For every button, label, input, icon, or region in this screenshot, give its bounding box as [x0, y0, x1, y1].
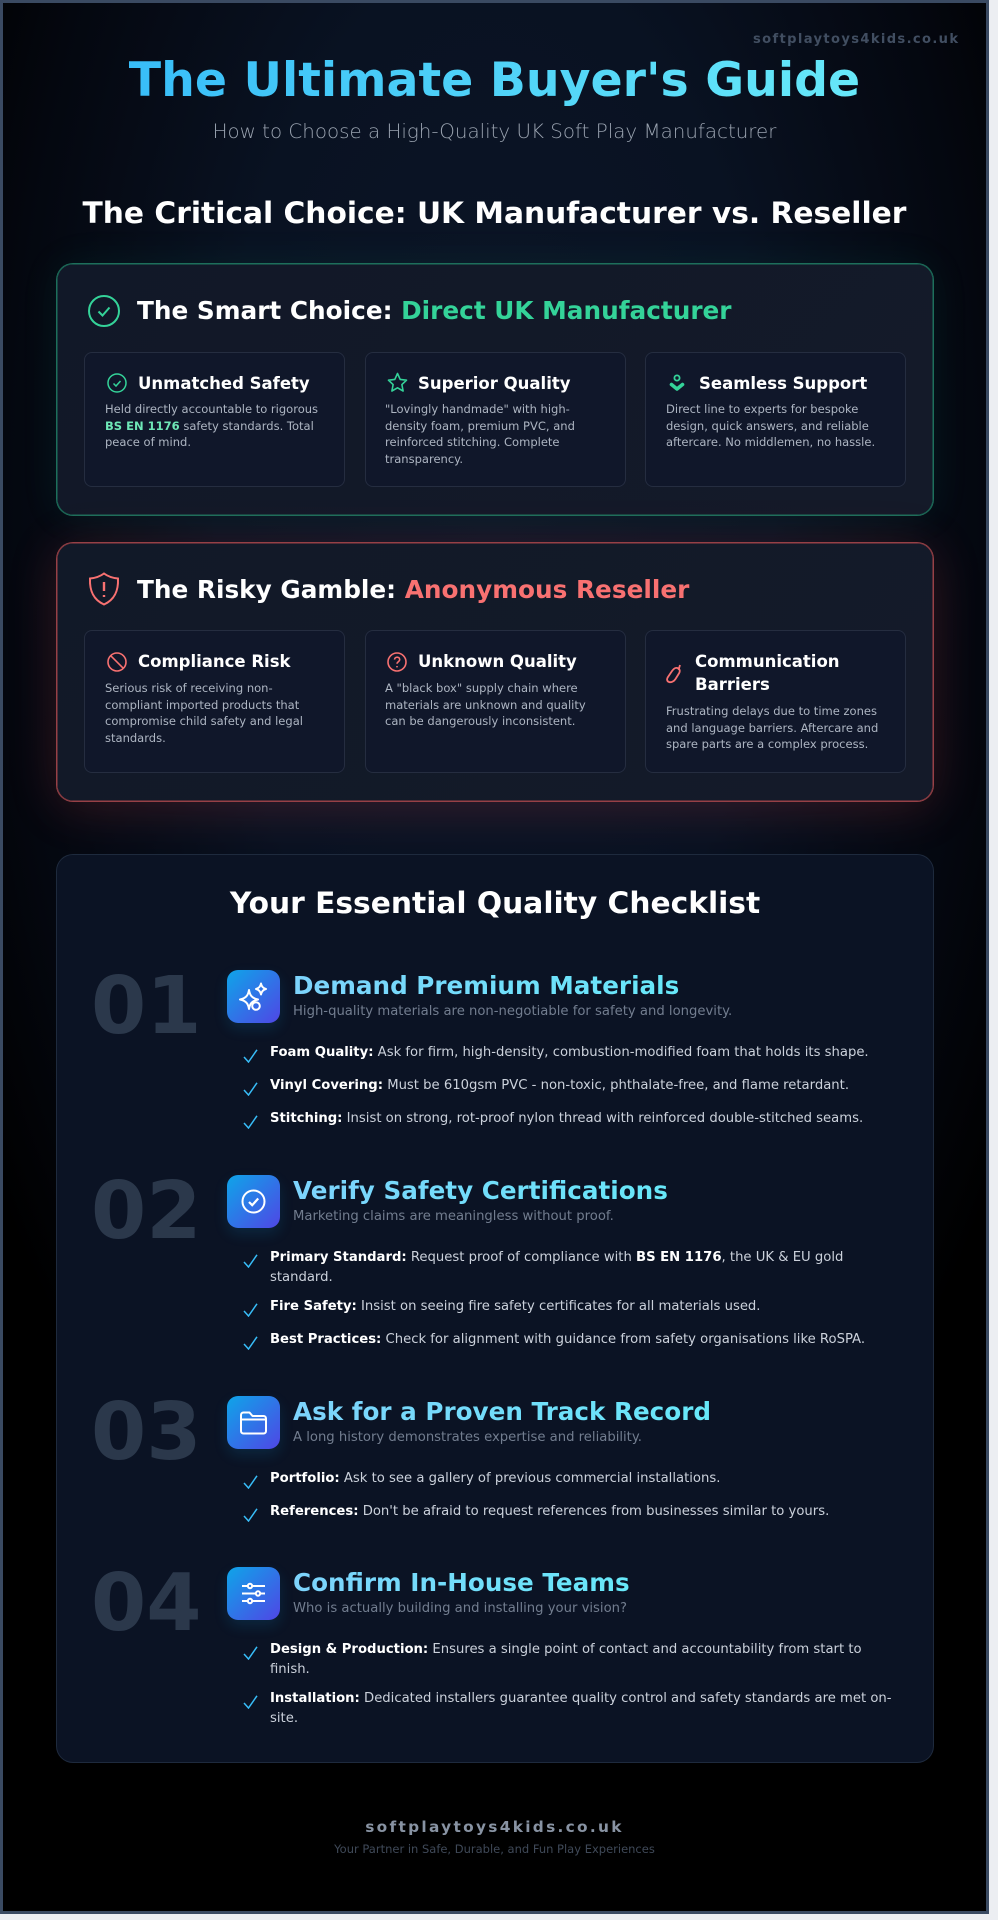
card: superior quality	[365, 352, 626, 487]
section title: Confirm In-House Teams	[293, 1568, 630, 1597]
card: compliance risk: compliant imported products that	[105, 698, 299, 712]
card: communication barriers: and language barriers. Aftercare and	[666, 720, 878, 734]
item: design and production	[244, 1642, 862, 1677]
card: superior quality: density foam, premium PVC, and	[385, 418, 575, 432]
number 04: 04	[91, 1556, 201, 1649]
card: communication barriers: Communication	[695, 652, 840, 671]
card: unmatched safety: BS EN 1176 safety standards. Total	[105, 418, 314, 432]
section title: Verify Safety Certifications	[293, 1176, 668, 1205]
card: seamless support: aftercare. No middlemen, no hassle.	[666, 435, 875, 449]
item: design and production: finish.	[270, 1662, 310, 1677]
number 03: 03	[91, 1385, 201, 1478]
card: compliance risk: Compliance Risk	[138, 652, 291, 671]
card: compliance risk: Serious risk of receiving non-	[105, 681, 273, 695]
item: installation: Installation: Dedicated installers guarantee quality control and safety standards are met on-	[270, 1691, 892, 1706]
item: primary standard: standard.	[270, 1270, 333, 1285]
card: unmatched safety: Unmatched Safety	[138, 374, 310, 393]
item: design and production: Design & Production: Ensures a single point of contact and accountability from start to	[270, 1642, 862, 1657]
card: communication barriers	[645, 630, 906, 773]
item: best practices: Best Practices: Check for alignment with guidance from safety organisations like RoSPA.	[270, 1332, 865, 1347]
checklist heading: Your Essential Quality Checklist	[230, 886, 760, 921]
number 02: 02	[91, 1164, 201, 1257]
item: primary standard	[244, 1250, 843, 1285]
card: unknown quality	[365, 630, 626, 773]
panel: smart choice	[57, 264, 933, 515]
heading: risky gamble: The Risky Gamble: Anonymous Reseller	[137, 575, 689, 604]
panel: risky gamble	[57, 543, 933, 801]
card: seamless support: Direct line to experts for bespoke	[666, 402, 858, 416]
number 01: 01	[91, 959, 201, 1052]
card: superior quality: "Lovingly handmade" with high-	[385, 402, 570, 416]
item: portfolio: Portfolio: Ask to see a gallery of previous commercial installations.	[270, 1471, 720, 1486]
icon: folder	[227, 1396, 280, 1449]
section 03: track record	[91, 1385, 829, 1522]
item: primary standard: Primary Standard: Request proof of compliance with BS EN 1176, the UK & EU gold	[270, 1250, 843, 1265]
section subtitle: Marketing claims are meaningless without proof.	[293, 1209, 614, 1224]
card: superior quality: reinforced stitching. Complete	[385, 435, 560, 449]
card: communication barriers: Barriers	[695, 675, 770, 694]
section title: Ask for a Proven Track Record	[293, 1397, 711, 1426]
item: fire safety: Fire Safety: Insist on seeing fire safety certificates for all materials used.	[270, 1299, 760, 1314]
section title: Demand Premium Materials	[293, 971, 679, 1000]
item: installation: site.	[270, 1711, 298, 1726]
section subtitle: Who is actually building and installing your vision?	[293, 1601, 627, 1616]
section subtitle: A long history demonstrates expertise and reliability.	[293, 1430, 642, 1445]
card: compliance risk	[84, 630, 345, 773]
card: unmatched safety: Held directly accountable to rigorous	[105, 402, 318, 416]
item: references: References: Don't be afraid to request references from businesses similar to yours.	[270, 1504, 829, 1519]
card: superior quality: Superior Quality	[418, 374, 571, 393]
item: installation	[244, 1691, 892, 1726]
card: compliance risk: standards.	[105, 730, 166, 744]
icon: sliders	[227, 1567, 280, 1620]
item: foam quality: Foam Quality: Ask for firm, high-density, combustion-modified foam that holds its shape.	[270, 1045, 869, 1060]
footer	[334, 1818, 655, 1856]
title: The Ultimate Buyer's Guide	[129, 53, 860, 108]
heading: smart choice: The Smart Choice: Direct UK Manufacturer	[137, 296, 732, 325]
card: unknown quality: can be dangerously inconsistent.	[385, 714, 575, 728]
card: communication barriers: spare parts are a complex process.	[666, 737, 868, 751]
card: seamless support: Seamless Support	[699, 374, 867, 393]
card: unknown quality: Unknown Quality	[418, 652, 577, 671]
section 02: safety certifications	[91, 1164, 865, 1350]
card: communication barriers: Frustrating delays due to time zones	[666, 704, 877, 718]
card: compliance risk: compromise child safety and legal	[105, 714, 303, 728]
icon: sparkles	[227, 970, 280, 1023]
section 04: in-house teams	[91, 1556, 892, 1726]
card: unknown quality: materials are unknown and quality	[385, 698, 586, 712]
site watermark: softplaytoys4kids.co.uk	[753, 32, 959, 47]
card: unmatched safety: peace of mind.	[105, 435, 191, 449]
item: vinyl covering: Vinyl Covering: Must be 610gsm PVC - non-toxic, phthalate-free, and flame retardant.	[270, 1078, 849, 1093]
footer tagline: Your Partner in Safe, Durable, and Fun Play Experiences	[334, 1842, 655, 1856]
subtitle: How to Choose a High-Quality UK Soft Play Manufacturer	[213, 120, 776, 143]
card: seamless support	[645, 352, 906, 487]
section subtitle: High-quality materials are non-negotiable for safety and longevity.	[293, 1004, 732, 1019]
card: superior quality: transparency.	[385, 452, 463, 466]
section 01: premium materials	[91, 959, 869, 1129]
card: unmatched safety	[84, 352, 345, 487]
card: unknown quality: A "black box" supply chain where	[385, 681, 578, 695]
panel: quality checklist	[57, 855, 933, 1762]
card: seamless support: design, quick answers, and reliable	[666, 418, 869, 432]
section heading: critical choice: The Critical Choice: UK Manufacturer vs. Reseller	[83, 196, 906, 231]
item: stitching: Stitching: Insist on strong, rot-proof nylon thread with reinforced double-stitched seams.	[270, 1111, 863, 1126]
footer site name: softplaytoys4kids.co.uk	[365, 1818, 624, 1836]
icon: verified check	[227, 1175, 280, 1228]
